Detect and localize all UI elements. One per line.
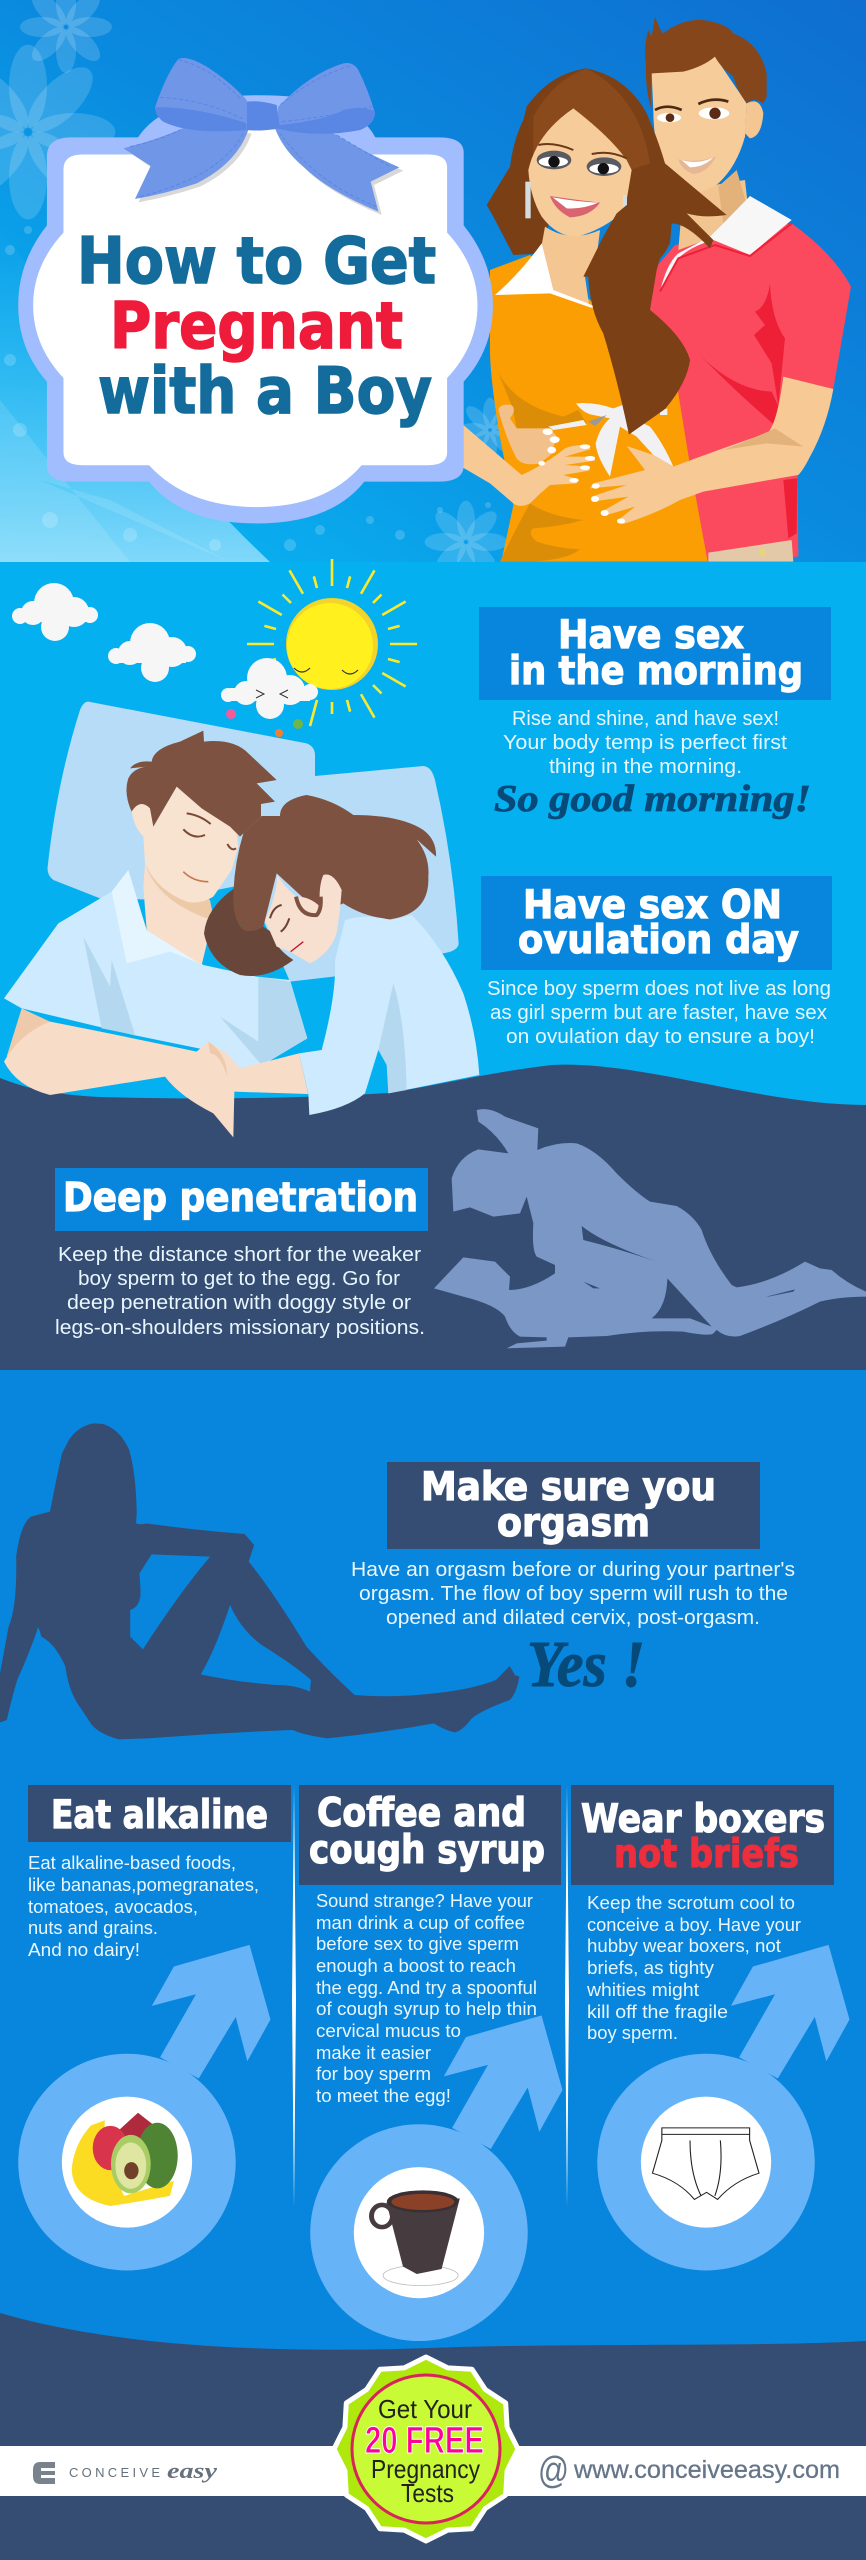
woman top: [299, 915, 479, 1115]
text: ovulation body: on ovulation day to ensure a boy!: [506, 1026, 815, 1048]
text: boxers body: briefs, as tighty: [587, 1957, 715, 1978]
text: so good morning: So good morning!: [494, 778, 811, 820]
text: coffee body: make it easier: [316, 2042, 431, 2063]
icon: male symbol with briefs: [597, 1945, 850, 2270]
woman face: [265, 874, 342, 963]
text: ovulation body: Since boy sperm does not live as long: [487, 978, 831, 1000]
text: alkaline body: nuts and grains.: [28, 1917, 158, 1938]
woman long hair: [527, 68, 727, 434]
title: How to Get: [77, 225, 436, 299]
panel: lower blue section background: [0, 1370, 866, 2350]
heading: wear boxers not briefs: Wear boxers: [581, 1797, 825, 1842]
panel: wear boxers not briefs: [571, 1785, 850, 2270]
illustration: sleeping couple: [4, 702, 479, 1137]
text: boxers body: boy sperm.: [587, 2022, 678, 2043]
badge: 20 free pregnancy tests: [334, 2357, 518, 2541]
heading: deep penetration: Deep penetration: [63, 1175, 418, 1221]
text: orgasm body: Have an orgasm before or during your partner's: [351, 1559, 795, 1581]
heading: have sex on ovulation day: ovulation day: [518, 918, 799, 963]
panel: hero background: [0, 0, 866, 583]
woman hair top: [233, 795, 436, 931]
text: coffee body: the egg. And try a spoonful: [316, 1977, 537, 1998]
text: orgasm body: orgasm. The flow of boy sperm will rush to the: [359, 1583, 788, 1605]
text: alkaline body: tomatoes, avocados,: [28, 1896, 198, 1917]
icon: bow: [123, 58, 403, 215]
heading: wear boxers not briefs: not briefs: [614, 1832, 799, 1877]
text: coffee body: to meet the egg!: [316, 2085, 451, 2106]
icon: sun: [221, 559, 417, 737]
text: coffee body: man drink a cup of coffee: [316, 1912, 525, 1933]
title: Pregnant: [110, 290, 403, 364]
heading: eat alkaline: [28, 1785, 291, 1842]
title card: [18, 58, 493, 523]
text: deep penetration body: legs-on-shoulders missionary positions.: [55, 1317, 425, 1339]
heading: have sex on ovulation day: [481, 876, 832, 970]
text: boxers body: hubby wear boxers, not: [587, 1935, 781, 1956]
text: coffee body: of cough syrup to help thin: [316, 1998, 537, 2019]
illustration: couple silhouette: [434, 1109, 866, 1348]
heading: make sure you orgasm: [387, 1462, 760, 1549]
text: orgasm body: opened and dilated cervix, post-orgasm.: [386, 1607, 760, 1629]
logo: conceive easy: CONCEIVE: [69, 2465, 160, 2480]
text: ovulation body: as girl sperm but are faster, have sex: [490, 1002, 827, 1024]
heading: have sex on ovulation day: Have sex ON: [523, 883, 782, 928]
panel: navy wave section: [0, 1065, 866, 1370]
text: morning body: [503, 708, 787, 778]
illustration: hero couple: [450, 17, 851, 562]
text: coffee body: [316, 1890, 537, 2106]
man shirt: [645, 223, 851, 562]
text: alkaline body: like bananas,pomegranates,: [28, 1874, 259, 1895]
panel: eat alkaline: [18, 1785, 291, 2270]
title: [77, 225, 436, 429]
logo: conceive easy: easy: [167, 2458, 217, 2483]
icon: male symbol with fruit: [18, 1945, 270, 2270]
text: deep penetration body: [55, 1244, 425, 1339]
text: morning body: Your body temp is perfect first: [503, 732, 787, 754]
heading: wear boxers not briefs: [571, 1785, 834, 1885]
heading: make sure you orgasm: orgasm: [497, 1501, 650, 1546]
text: boxers body: whities might: [586, 1979, 699, 2000]
man head: [645, 17, 792, 292]
text: coffee body: before sex to give sperm: [316, 1933, 519, 1954]
icon: clouds: [12, 583, 196, 682]
text: boxers body: Keep the scrotum cool to: [587, 1892, 795, 1913]
logo: conceive easy: [33, 2458, 217, 2484]
woman hair under: [204, 887, 293, 976]
man neck and face: [126, 731, 277, 965]
text: boxers body: conceive a boy. Have your: [587, 1914, 801, 1935]
text: morning body: thing in the morning.: [549, 756, 742, 778]
lower dress folds and ribbon: [493, 360, 673, 562]
icon: male symbol with coffee: [310, 2015, 562, 2341]
text: alkaline body: Eat alkaline-based foods,: [28, 1852, 236, 1873]
text: alkaline body: And no dairy!: [28, 1939, 140, 1960]
arms, hands and trousers: [450, 377, 833, 562]
text: deep penetration body: boy sperm to get to the egg. Go for: [78, 1268, 400, 1290]
pillows: [48, 702, 459, 982]
woman neck and face: [495, 108, 632, 308]
heading: have sex in the morning: in the morning: [509, 649, 803, 694]
badge: 20 free pregnancy tests: 20 FREE: [365, 2420, 484, 2462]
woman dress: [490, 255, 708, 562]
text: yes: Yes !: [527, 1628, 645, 1701]
badge: 20 free pregnancy tests: Get Your: [378, 2394, 472, 2424]
heading: coffee and cough syrup: Coffee and: [317, 1791, 526, 1836]
text: morning body: Rise and shine, and have sex!: [512, 708, 779, 730]
badge: 20 free pregnancy tests: Tests: [401, 2478, 454, 2508]
badge: 20 free pregnancy tests: Pregnancy: [371, 2454, 480, 2484]
woman front lock: [583, 177, 690, 434]
heading: have sex in the morning: [479, 607, 831, 700]
text: orgasm body: [351, 1559, 795, 1629]
heading: eat alkaline: Eat alkaline: [51, 1793, 268, 1838]
footer band: [0, 2446, 866, 2496]
panel: footer navy background: [0, 2313, 866, 2560]
heading: coffee and cough syrup: [299, 1785, 561, 1885]
title: with a Boy: [98, 355, 432, 429]
heading: deep penetration: [55, 1168, 428, 1231]
heading: have sex in the morning: Have sex: [558, 613, 744, 658]
text: deep penetration body: deep penetration with doggy style or: [67, 1292, 411, 1314]
man shirt: [4, 870, 307, 1068]
heading: make sure you orgasm: Make sure you: [421, 1465, 716, 1510]
text: deep penetration body: Keep the distance short for the weaker: [58, 1244, 421, 1266]
woman back hair: [487, 68, 587, 255]
illustration: woman silhouette: [0, 1423, 519, 1739]
website url: www.conceiveeasy.com: [573, 2456, 840, 2484]
text: coffee body: for boy sperm: [316, 2063, 431, 2084]
panel: coffee and cough syrup: [299, 1785, 562, 2341]
text: alkaline body: [28, 1852, 259, 1960]
text: boxers body: kill off the fragile: [587, 2001, 728, 2022]
text: coffee body: enough a boost to reach: [316, 1955, 516, 1976]
website url: [538, 2450, 840, 2492]
text: boxers body: [586, 1892, 801, 2043]
text: coffee body: cervical mucus to: [316, 2020, 461, 2041]
website url: @: [538, 2450, 569, 2492]
text: coffee body: Sound strange? Have your: [316, 1890, 533, 1911]
heading: coffee and cough syrup: cough syrup: [309, 1828, 545, 1873]
text: ovulation body: [487, 978, 831, 1048]
man arm: [4, 1022, 308, 1137]
panel: morning section background: [0, 562, 866, 1122]
